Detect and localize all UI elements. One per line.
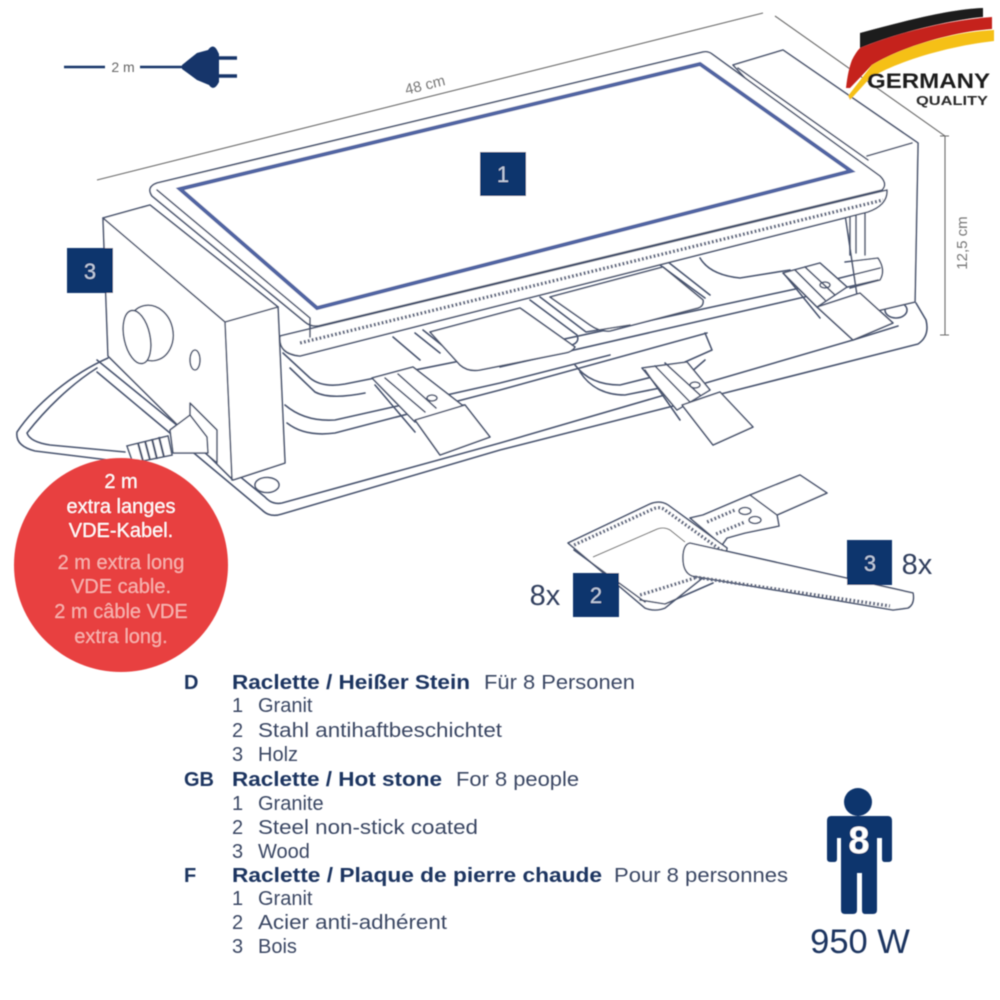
legend: English: 1 — [232, 793, 243, 815]
left control box — [103, 205, 285, 480]
legend: English: 2 — [232, 817, 243, 839]
pan body — [568, 502, 727, 610]
wattage: 950 W — [810, 923, 910, 961]
legend: English: GB — [184, 769, 214, 791]
legend: German: Granit — [258, 695, 313, 717]
red callout circle: VDE cable. — [71, 576, 171, 598]
pan handle — [690, 475, 827, 545]
legend: French: 1 — [232, 888, 243, 910]
power cord — [17, 358, 125, 462]
legend: English: Raclette / Hot stone — [232, 769, 442, 791]
cable length icon: 2 m — [111, 59, 135, 75]
right end housing — [733, 50, 918, 315]
icon: person for 8 people — [827, 788, 892, 914]
legend: German: Holz — [258, 744, 298, 766]
width dimension: 48 cm: 48 cm — [403, 72, 447, 99]
stone plate — [150, 52, 885, 326]
legend: English: For 8 people — [456, 769, 579, 791]
legend: English — [184, 769, 579, 863]
legend: French: Acier anti-adhérent — [258, 912, 447, 934]
red callout circle: 2 m câble VDE — [54, 601, 188, 623]
red callout circle: extra langes — [67, 496, 175, 518]
icon: person for 8 people: 8 — [848, 820, 870, 862]
depth and height dimension: 12,5 cm: 12,5 cm — [954, 216, 971, 270]
legend: English: 3 — [232, 841, 243, 863]
legend: German: 3 — [232, 744, 243, 766]
legend: German: Stahl antihaftbeschichtet — [258, 720, 502, 742]
indicator light — [190, 350, 200, 370]
front handle middle — [642, 362, 710, 410]
lower pan tier — [287, 333, 707, 434]
badge 3 with quantity: 3 — [864, 551, 876, 576]
legend: English: Steel non-stick coated — [258, 817, 478, 839]
badge 2 with quantity: 8x — [530, 580, 561, 612]
legend: French: Granit — [258, 888, 313, 910]
badge 3 on control box: 3 — [84, 259, 96, 284]
legend: French: Raclette / Plaque de pierre chaude — [232, 865, 602, 887]
legend: German: Raclette / Heißer Stein — [232, 672, 470, 694]
legend: French: 3 — [232, 936, 243, 958]
cable length icon — [64, 46, 237, 88]
temperature knob — [122, 301, 178, 365]
loose raclette pan and scraper — [568, 475, 913, 610]
red callout circle: 2 m — [104, 471, 138, 493]
red callout circle — [14, 458, 228, 672]
legend: German: Für 8 Personen — [484, 672, 635, 694]
badge 3 with quantity: 8x — [902, 549, 933, 581]
legend: French: Bois — [258, 936, 297, 958]
badge 1: 1 — [497, 162, 509, 187]
legend: English: Granite — [258, 793, 324, 815]
badge 2 with quantity — [530, 573, 619, 617]
raclette grill illustration — [17, 50, 927, 515]
badge 3 on control box — [67, 248, 113, 293]
legend: French: F — [184, 865, 196, 887]
Germany quality logo: QUALITY — [916, 93, 988, 108]
Germany quality logo — [846, 8, 994, 108]
legend: French — [184, 865, 788, 958]
power plug and socket — [190, 403, 217, 463]
badge 3 with quantity — [847, 540, 933, 585]
red callout circle: VDE-Kabel. — [69, 520, 173, 542]
legend: German: 2 — [232, 720, 243, 742]
legend: German: 1 — [232, 695, 243, 717]
front handle left — [372, 367, 465, 422]
pans in the grill — [430, 308, 575, 370]
legend: German — [184, 672, 635, 766]
badge 2 with quantity: 2 — [590, 583, 602, 608]
legend: German: D — [184, 672, 198, 694]
legend: French: Pour 8 personnes — [614, 865, 788, 887]
legend: French: 2 — [232, 912, 243, 934]
back handle right — [783, 263, 847, 307]
wooden scraper — [683, 543, 913, 610]
badge 1 — [480, 152, 526, 196]
depth and height dimension: 12,5 cm — [775, 16, 971, 335]
rope-like rim below the stone — [280, 190, 887, 356]
base frame — [97, 326, 898, 503]
legend: English: Wood — [258, 841, 310, 863]
Germany quality logo: GERMANY — [867, 70, 990, 93]
width dimension: 48 cm — [97, 13, 763, 180]
red callout circle: extra long. — [74, 626, 168, 648]
red callout circle: 2 m extra long — [58, 552, 184, 574]
blue inner outline of the stone — [180, 64, 851, 308]
